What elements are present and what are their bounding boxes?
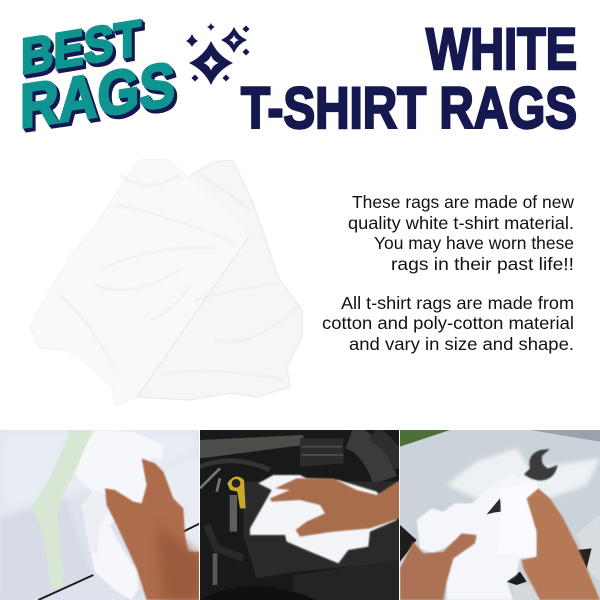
cloth <box>250 475 397 563</box>
logo word: BEST: BEST <box>22 10 143 87</box>
text block: description: You may have worn these <box>374 233 574 253</box>
yellow cap <box>227 477 246 508</box>
icon: wrench <box>524 449 558 481</box>
text block: description: All t-shirt rags are made from <box>341 293 574 313</box>
door gap <box>38 523 200 600</box>
logo word: RAGS: RAGS <box>20 50 175 142</box>
logo word: RAGS: RAGS <box>23 54 178 145</box>
photo: hands with cloth on car <box>400 430 600 600</box>
hand <box>105 458 200 600</box>
cloth <box>416 496 532 600</box>
photo: engine bay <box>200 430 400 600</box>
text block: description: rags in their past life!! <box>391 254 574 274</box>
cloth <box>75 430 163 600</box>
text block: description <box>322 192 574 354</box>
masking tape <box>32 430 95 589</box>
text block: description: and vary in size and shape. <box>349 334 574 354</box>
text block: description: These rags are made of new <box>352 192 574 212</box>
rag photo: white t-shirt rags <box>30 160 302 405</box>
logo: Best Rags <box>20 8 178 146</box>
logo word: RAGS: RAGS <box>21 52 176 144</box>
icon: sparkles <box>186 23 250 85</box>
text block: description: quality white t-shirt material. <box>348 213 574 233</box>
foam <box>447 448 600 502</box>
rag wrinkles <box>60 175 300 380</box>
left hand <box>400 533 477 600</box>
front rag panel <box>30 160 250 405</box>
photo: wiping car door <box>0 430 200 600</box>
right hand <box>522 488 600 600</box>
hand <box>270 478 400 537</box>
logo word: BEST: BEST <box>21 9 141 85</box>
text block: description: cotton and poly-cotton material <box>322 313 574 333</box>
title <box>241 17 577 141</box>
logo word: BEST: BEST <box>24 12 144 88</box>
